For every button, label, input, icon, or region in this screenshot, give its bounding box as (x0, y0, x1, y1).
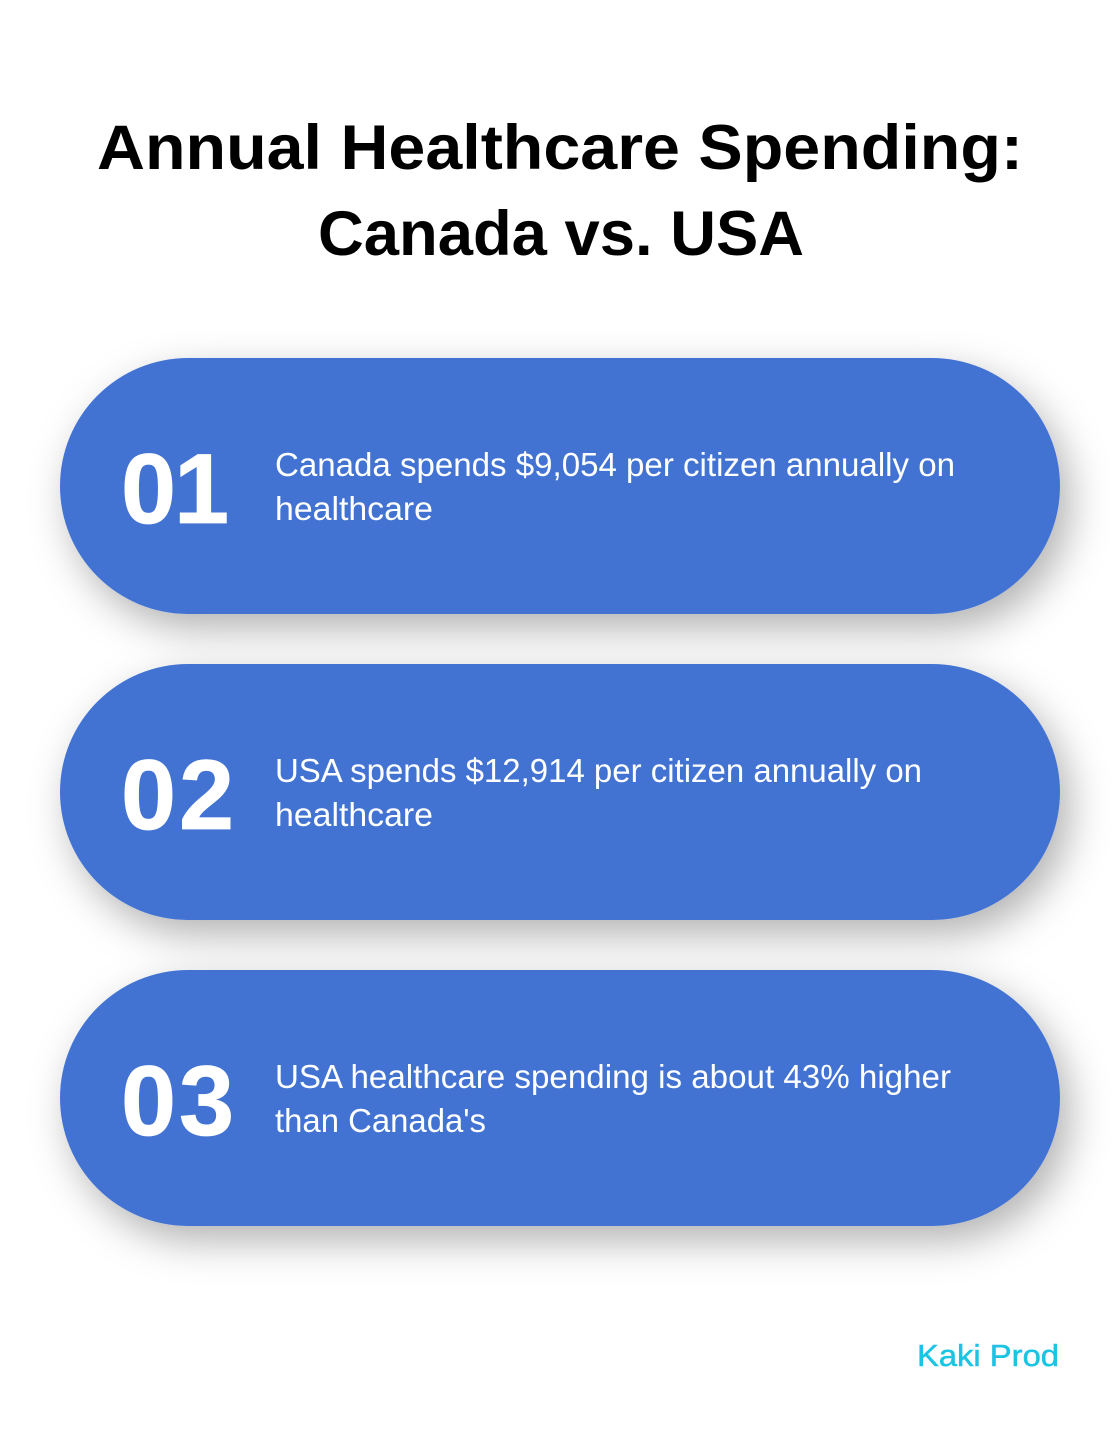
panel: Canada spending (60, 358, 1060, 614)
title (97, 113, 1023, 269)
panel: USA spending (60, 664, 1060, 920)
text: USA spending (275, 752, 922, 833)
number 01: 01 (121, 433, 229, 544)
text: Canada spending (275, 446, 955, 527)
text: Canada spending: healthcare (275, 490, 433, 527)
panel: spending comparison (60, 970, 1060, 1226)
text: USA spending: USA spends $12,914 per citizen annually on (275, 752, 922, 789)
text: spending comparison: USA healthcare spending is about 43% higher (275, 1058, 951, 1095)
text: spending comparison: than Canada's (275, 1102, 486, 1139)
logo: Kaki Prod: Kaki Prod (917, 1338, 1059, 1373)
title: Canada vs. USA (318, 199, 804, 269)
text: USA spending: healthcare (275, 796, 433, 833)
title: Annual Healthcare Spending: (97, 113, 1023, 183)
number 02: 02 (121, 739, 234, 850)
number 03: 03 (121, 1045, 234, 1156)
text: spending comparison (275, 1058, 951, 1139)
text: Canada spending: Canada spends $9,054 per citizen annually on (275, 446, 955, 483)
